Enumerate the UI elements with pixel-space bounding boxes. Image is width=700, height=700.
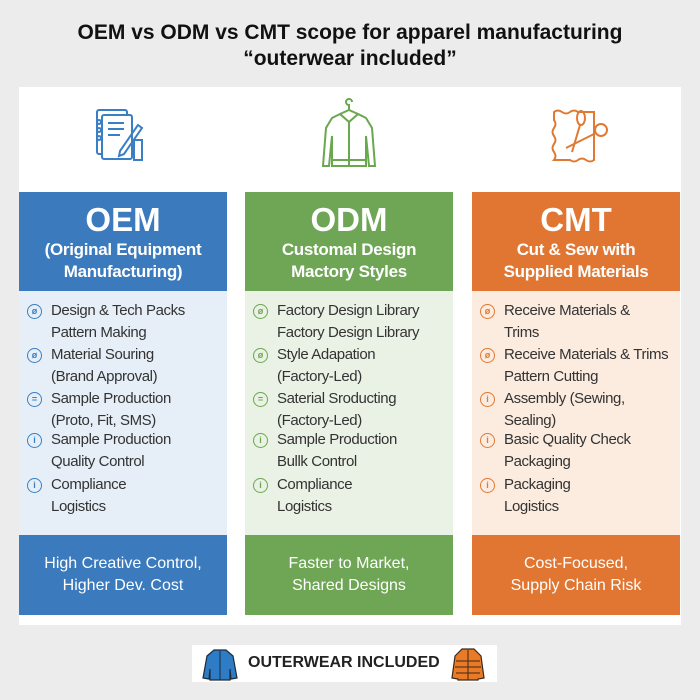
icon: fabric and scissors (552, 110, 608, 162)
list: OEM scope: i (33, 435, 36, 445)
header: ODM: Mactory Styles (291, 262, 407, 281)
list: ODM scope: Style Adapation (277, 346, 375, 363)
list: OEM scope: Compliance (51, 476, 126, 493)
text: OUTERWEAR INCLUDED: OUTERWEAR INCLUDED (248, 654, 440, 671)
list: CMT scope: i (486, 435, 489, 445)
footer: CMT (472, 535, 680, 615)
list: CMT scope: Sealing) (504, 412, 556, 429)
footer: OEM: High Creative Control, (44, 555, 202, 572)
footer: CMT: Supply Chain Risk (511, 577, 641, 594)
header: ODM: ODM (310, 201, 388, 238)
title: “outerwear included” (243, 47, 457, 70)
list: CMT scope: Receive Materials & Trims (504, 346, 668, 363)
header: CMT (472, 192, 680, 291)
column: OEM (19, 192, 227, 615)
footer: OEM: Higher Dev. Cost (63, 577, 183, 594)
footer: OEM (19, 535, 227, 615)
list: CMT scope: Basic Quality Check (504, 431, 631, 448)
header: CMT: Cut & Sew with (517, 240, 635, 259)
list: CMT scope: Packaging (504, 453, 570, 470)
list: CMT scope: ø (485, 306, 490, 316)
header: OEM: Manufacturing) (64, 262, 182, 281)
list: OEM scope: Quality Control (51, 453, 144, 470)
list: ODM scope: Saterial Sroducting (277, 390, 396, 407)
list: CMT scope (472, 291, 680, 535)
list: ODM scope: i (259, 435, 262, 445)
title (78, 21, 622, 70)
header: ODM: Customal Design (282, 240, 416, 259)
list: CMT scope: Packaging (504, 476, 570, 493)
footer: CMT: Cost-Focused, (524, 555, 628, 572)
list: OEM scope (19, 291, 227, 535)
list: OEM scope: ø (32, 350, 37, 360)
header: OEM (19, 192, 227, 291)
white panel (19, 87, 681, 625)
list: ODM scope: Factory Design Library (277, 324, 419, 341)
list: CMT scope: Pattern Cutting (504, 368, 598, 385)
list: ODM scope: Compliance (277, 476, 352, 493)
list: ODM scope: ø (258, 306, 263, 316)
list: CMT scope: Trims (504, 324, 539, 341)
list: ODM scope: Logistics (277, 498, 332, 515)
banner: outerwear included (192, 645, 497, 682)
column: ODM (245, 192, 453, 615)
header: OEM: OEM (85, 201, 161, 238)
list: ODM scope: (Factory-Led) (277, 368, 362, 385)
list: OEM scope: Design & Tech Packs (51, 302, 185, 319)
list: OEM scope: Pattern Making (51, 324, 146, 341)
list: OEM scope: Material Souring (51, 346, 154, 363)
header: CMT: CMT (540, 201, 612, 238)
list: ODM scope: = (258, 394, 263, 404)
list: OEM scope: ø (32, 306, 37, 316)
icon: orange puffer jacket (451, 648, 485, 681)
list: CMT scope: i (486, 480, 489, 490)
list: CMT scope: ø (485, 350, 490, 360)
list: CMT scope: Receive Materials & (504, 302, 630, 319)
title: OEM vs ODM vs CMT scope for apparel manufacturing (78, 21, 622, 44)
list: OEM scope: i (33, 480, 36, 490)
list: OEM scope: (Brand Approval) (51, 368, 157, 385)
list: OEM scope: (Proto, Fit, SMS) (51, 412, 156, 429)
list: ODM scope (245, 291, 453, 535)
list: ODM scope: i (259, 480, 262, 490)
column: CMT (472, 192, 680, 615)
icon: blue jacket (202, 649, 238, 681)
footer: ODM: Faster to Market, (289, 555, 409, 572)
header: CMT: Supplied Materials (504, 262, 648, 281)
list: ODM scope: (Factory-Led) (277, 412, 362, 429)
list: OEM scope: Logistics (51, 498, 106, 515)
icon: notebook and pencil (96, 109, 144, 161)
list: OEM scope: Sample Production (51, 390, 171, 407)
list: OEM scope: Sample Production (51, 431, 171, 448)
list: ODM scope: Sample Production (277, 431, 397, 448)
icon: jacket on hanger (322, 98, 376, 167)
header: ODM (245, 192, 453, 291)
footer: ODM (245, 535, 453, 615)
footer: ODM: Shared Designs (292, 577, 406, 594)
list: CMT scope: Logistics (504, 498, 559, 515)
list: ODM scope: ø (258, 350, 263, 360)
list: CMT scope: i (486, 394, 489, 404)
header: OEM: (Original Equipment (45, 240, 201, 259)
list: CMT scope: Assembly (Sewing, (504, 390, 625, 407)
list: OEM scope: = (32, 394, 37, 404)
list: ODM scope: Factory Design Library (277, 302, 419, 319)
list: ODM scope: Bullk Control (277, 453, 357, 470)
